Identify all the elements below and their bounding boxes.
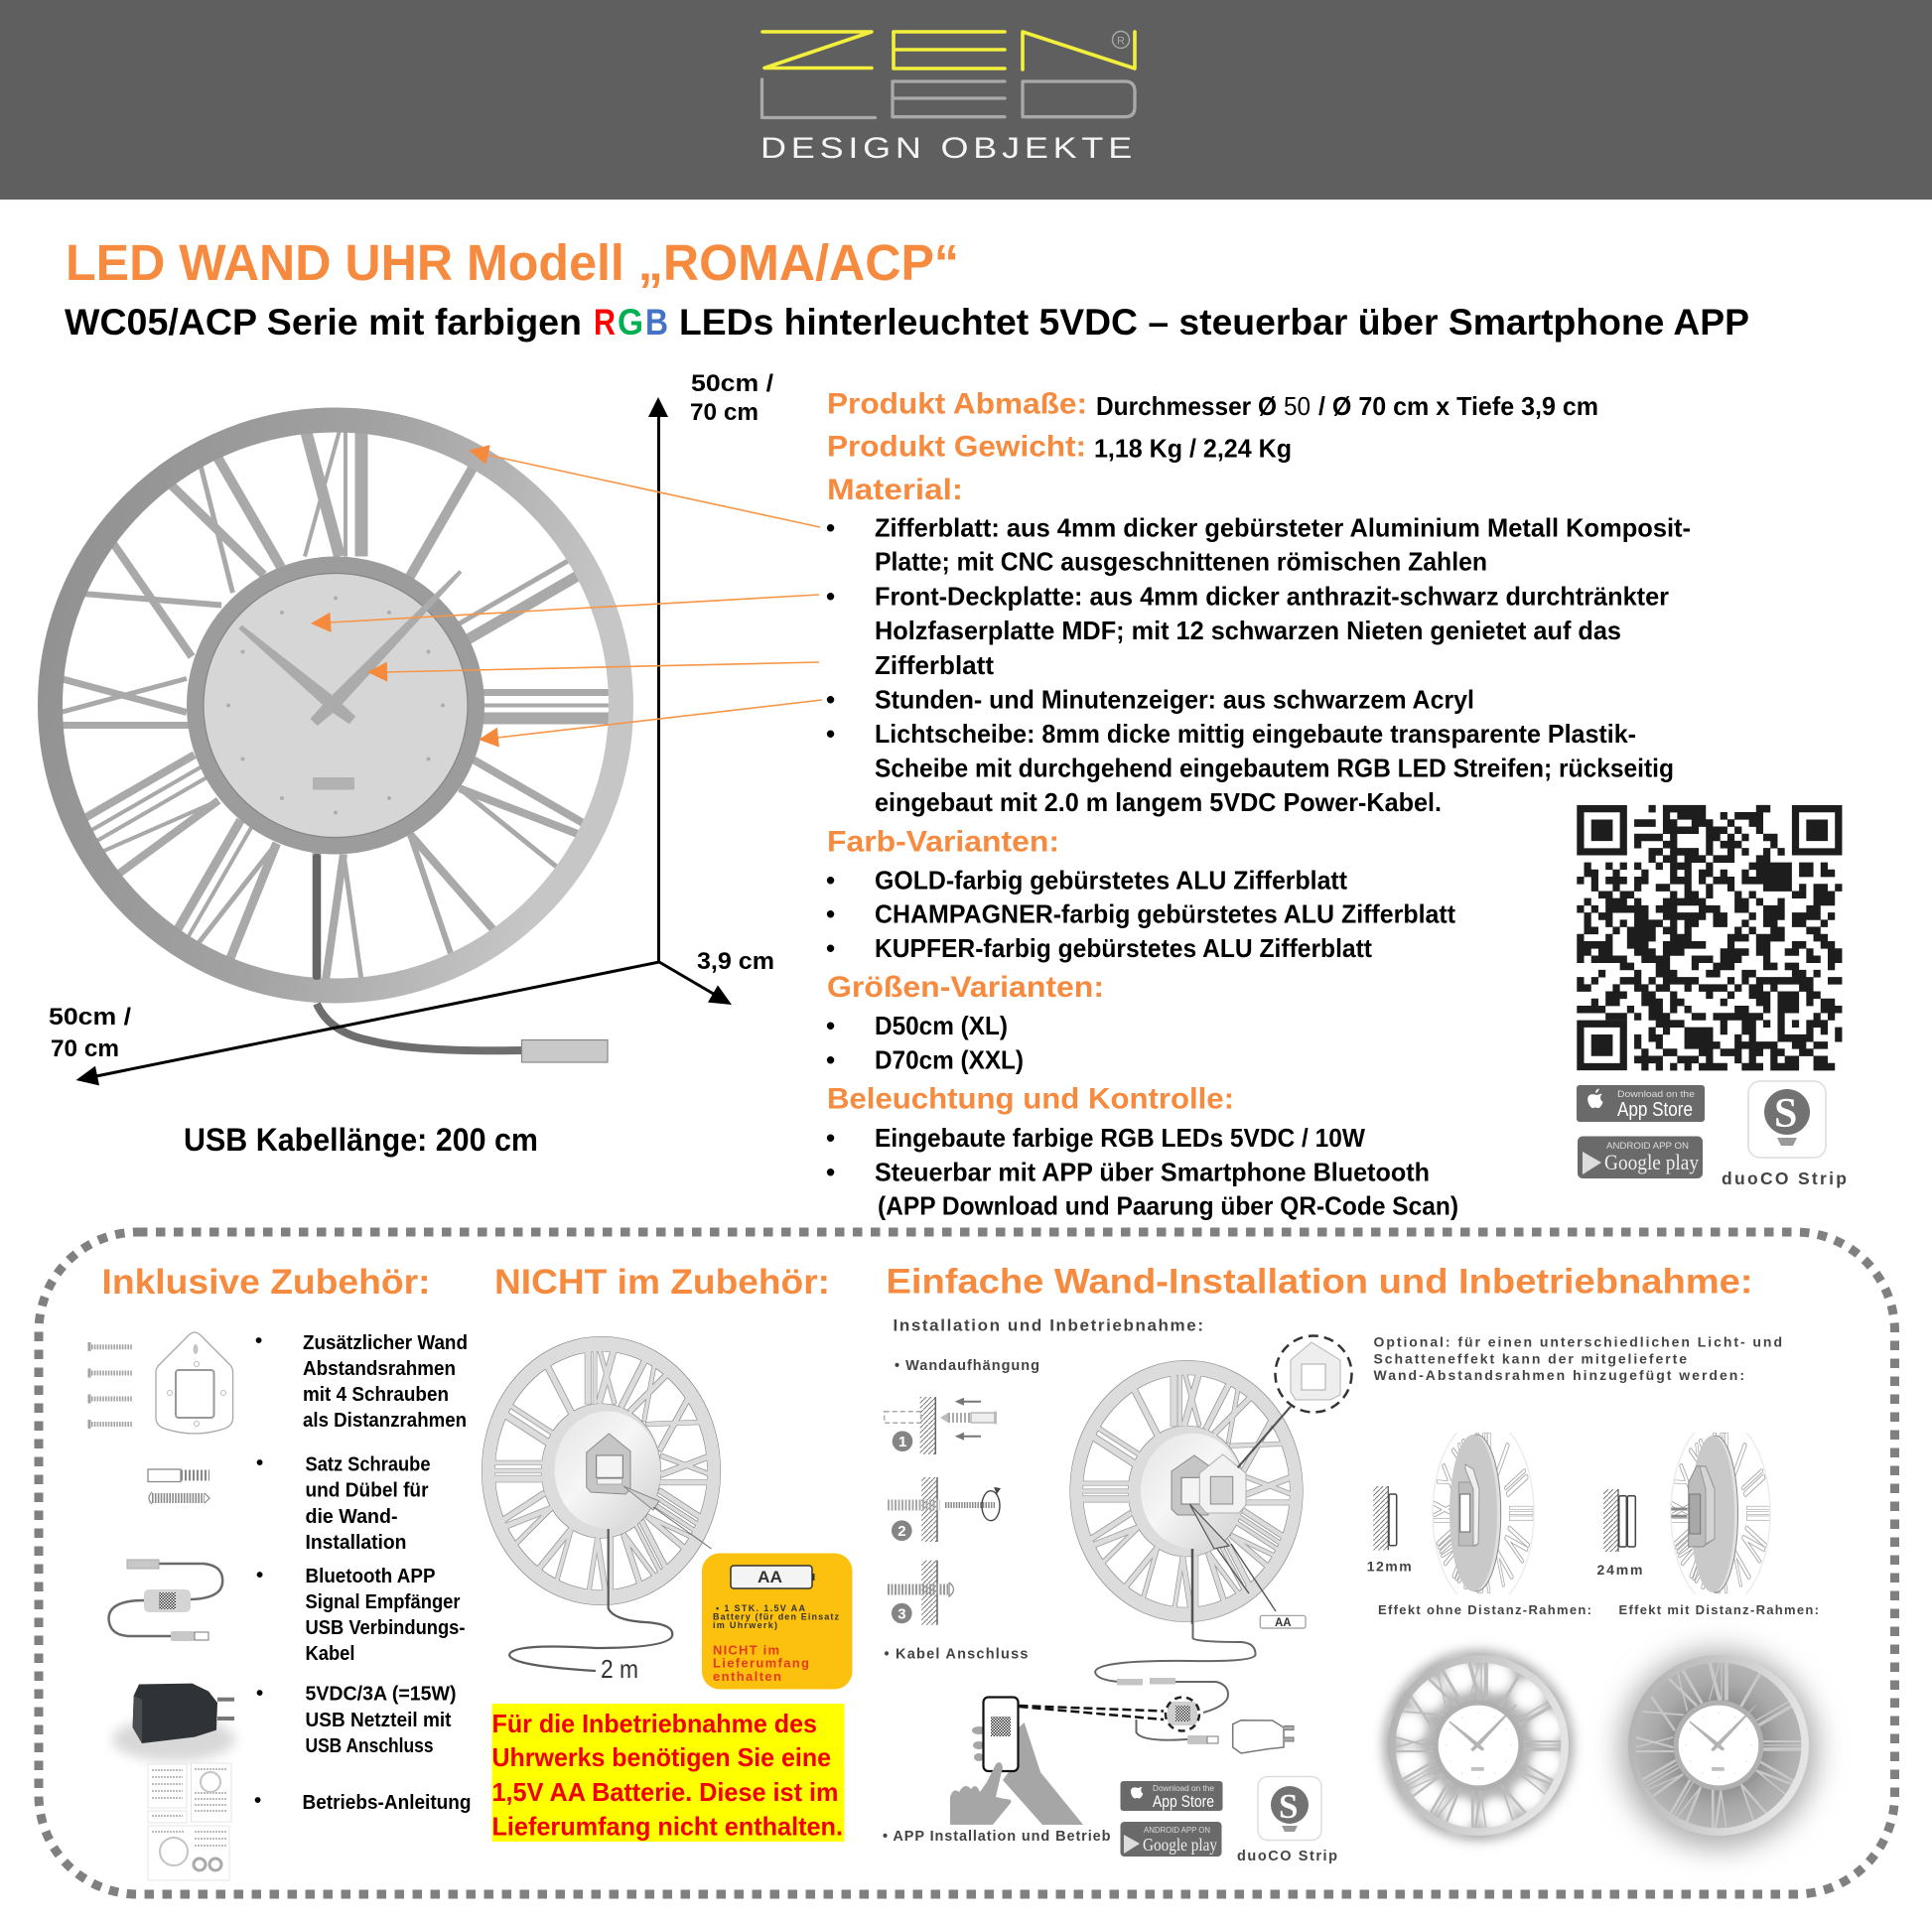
spec: weight <box>827 431 1292 463</box>
list: spacer frame: Zusätzlicher Wand <box>303 1331 468 1354</box>
list: Bluetooth receiver: Signal Empfänger <box>306 1590 461 1613</box>
badge: App Store small <box>1120 1781 1223 1811</box>
spec: material <box>826 474 1691 817</box>
subtitle: B <box>645 302 668 343</box>
heading: installation: Einfache Wand-Installation und Inbetriebnahme: <box>886 1263 1753 1301</box>
list: spacer frame: mit 4 Schrauben <box>303 1383 449 1406</box>
icon: Bluetooth receiver cable <box>109 1560 222 1641</box>
not included note: Lieferumfang <box>713 1656 809 1670</box>
header banner <box>0 0 1932 200</box>
receiver module <box>1168 1702 1197 1725</box>
title: LED WAND UHR Modell „ROMA/ACP“ <box>66 234 959 291</box>
spec: material: Lichtscheibe: 8mm dicke mittig eingebaute transparente Plastik- <box>875 719 1636 749</box>
spec: material: • <box>826 512 835 542</box>
step 3: screw fixed: 3 <box>897 1606 906 1622</box>
badge: App Store small: App Store <box>1153 1792 1214 1811</box>
power cable <box>317 1004 522 1050</box>
logo: ZEN LED <box>762 32 1135 117</box>
hub ring <box>196 566 476 846</box>
list: screws and dowels <box>256 1451 431 1554</box>
spec: lighting and control: Beleuchtung und Kontrolle: <box>827 1082 1234 1116</box>
spec: dimensions: Durchmesser Ø <box>1096 391 1277 421</box>
subtitle: G <box>618 302 643 343</box>
list: spacer frame <box>255 1329 468 1432</box>
main clock <box>50 420 621 1062</box>
spec: colour variants: • <box>826 899 835 929</box>
not included note <box>713 1642 809 1684</box>
battery description <box>713 1603 840 1630</box>
badge: App Store: Download on the <box>1617 1089 1695 1100</box>
badge: App Store: App Store <box>1617 1099 1693 1121</box>
callout: AA battery <box>702 1553 852 1690</box>
list: spacer frame: als Distanzrahmen <box>303 1409 467 1432</box>
warning box <box>492 1704 844 1842</box>
spec: weight: Produkt Gewicht: <box>827 431 1086 463</box>
dimension labels: 70 cm <box>690 399 759 426</box>
app name label small: duoCO Strip <box>1237 1849 1337 1864</box>
dial label plate <box>313 777 354 790</box>
hub disc <box>554 1412 659 1529</box>
registered mark: R <box>1117 36 1125 48</box>
list: screws and dowels: und Dübel für <box>306 1479 429 1501</box>
list: USB adapter: 5VDC/3A (=15W) <box>306 1682 457 1706</box>
step 1: drill and dowel: 1 <box>898 1434 906 1450</box>
diagram: clock side view without spacer <box>1432 1433 1535 1594</box>
step 2: insert screw: 2 <box>897 1523 906 1540</box>
spec: size variants: Größen-Varianten: <box>827 971 1104 1004</box>
badge: Google play <box>1578 1136 1703 1178</box>
spec: dimensions: 50 <box>1284 391 1311 421</box>
spec: material: Zifferblatt: aus 4mm dicker gebürsteter Aluminium Metall Komposit- <box>875 512 1691 542</box>
spec: material: Platte; mit CNC ausgeschnittenen römischen Zahlen <box>875 546 1487 576</box>
spec: lighting and control <box>826 1082 1458 1221</box>
list: USB adapter <box>256 1682 457 1757</box>
badge: Google play small <box>1120 1822 1221 1857</box>
cable over clock <box>1191 1549 1193 1624</box>
render: lit clock without spacer <box>1384 1651 1573 1840</box>
battery description: • 1 STK. 1.5V AA <box>716 1603 806 1613</box>
spec: weight: 1,18 Kg / 2,24 Kg <box>1094 433 1292 463</box>
spec: lighting and control: Eingebaute farbige RGB LEDs 5VDC / 10W <box>875 1123 1365 1153</box>
warning box: Lieferumfang nicht enthalten. <box>492 1811 843 1841</box>
spec: size variants: D50cm (XL) <box>875 1011 1008 1040</box>
diagram: 24mm spacer: 24mm <box>1596 1562 1642 1578</box>
spec: material: • <box>826 582 835 612</box>
spec: colour variants <box>826 826 1455 963</box>
outer ring <box>50 420 621 991</box>
list: spacer frame: • <box>255 1329 262 1352</box>
list: manual: Betriebs-Anleitung <box>302 1791 471 1814</box>
spec: colour variants: • <box>826 866 835 895</box>
rivets <box>226 596 445 814</box>
charger <box>1233 1721 1284 1753</box>
heading: not included: NICHT im Zubehör: <box>494 1263 830 1302</box>
spec: size variants <box>826 971 1104 1074</box>
spec: lighting and control: Steuerbar mit APP über Smartphone Bluetooth <box>875 1158 1430 1187</box>
spec: material: Stunden- und Minutenzeiger: aus schwarzem Acryl <box>875 685 1474 715</box>
QR code <box>1577 809 1842 1067</box>
spec: material: Scheibe mit durchgehend eingebautem RGB LED Streifen; rückseitig <box>875 753 1674 782</box>
panel: accessories and installation dashed frame <box>39 1232 1894 1894</box>
USB plug <box>1187 1735 1207 1744</box>
label: cable connection: • Kabel Anschluss <box>884 1646 1029 1662</box>
optional effect note <box>1374 1334 1782 1383</box>
pointer wedge <box>1189 1504 1229 1549</box>
caption: with spacer: Effekt mit Distanz-Rahmen: <box>1618 1602 1819 1617</box>
AA battery tag <box>1260 1615 1306 1628</box>
list: Bluetooth receiver <box>256 1564 465 1665</box>
clock back view with battery lead <box>488 1344 714 1684</box>
dimension labels: 50cm / <box>691 370 773 397</box>
step 3: screw fixed <box>888 1561 953 1625</box>
step 1: drill and dowel <box>885 1397 997 1454</box>
optional effect note: Wand-Abstandsrahmen hinzugefügt werden: <box>1374 1367 1744 1383</box>
dimension labels: 3,9 cm <box>697 948 774 975</box>
spec: colour variants: CHAMPAGNER-farbig gebürstetes ALU Zifferblatt <box>875 899 1455 929</box>
logo subtitle: DESIGN OBJEKTE <box>760 132 1137 165</box>
spec: material: eingebaut mit 2.0 m langem 5VDC Power-Kabel. <box>875 787 1442 817</box>
step 2: insert screw <box>888 1477 1001 1542</box>
wiring diagram <box>1019 1622 1294 1753</box>
icon: USB power adapter <box>112 1684 235 1761</box>
spec: dimensions: Produkt Abmaße: <box>827 387 1087 421</box>
list: Bluetooth receiver: Kabel <box>306 1642 355 1665</box>
list: manual <box>254 1789 471 1814</box>
battery description: Battery (für den Einsatz <box>713 1612 840 1622</box>
cable length label: 2 m <box>601 1654 638 1684</box>
spec: dimensions <box>827 387 1598 421</box>
spec: lighting and control: (APP Download und Paarung über QR-Code Scan) <box>878 1191 1458 1221</box>
dimension labels: 50cm / <box>49 1004 131 1031</box>
hand with smartphone <box>950 1698 1083 1825</box>
list: USB adapter: USB Netzteil mit <box>306 1709 452 1731</box>
not included note: enthalten <box>713 1669 781 1684</box>
spec: material: • <box>826 719 835 749</box>
spec: colour variants: • <box>826 933 835 963</box>
subtitle: LEDs hinterleuchtet 5VDC – steuerbar über Smartphone APP <box>679 302 1749 343</box>
spec: material: • <box>826 685 835 715</box>
dark cable bar <box>313 854 321 980</box>
spec: colour variants: KUPFER-farbig gebürstetes ALU Zifferblatt <box>875 933 1372 963</box>
icon: duoCO Strip <box>1748 1081 1826 1158</box>
list: USB adapter: • <box>256 1682 263 1705</box>
clock hands <box>238 570 462 726</box>
cable <box>509 1529 672 1671</box>
dimension labels: 70 cm <box>51 1035 119 1062</box>
icon: duoCO Strip: S <box>1774 1091 1797 1137</box>
spec: material: Front-Deckplatte: aus 4mm dicker anthrazit-schwarz durchtränkter <box>875 582 1669 612</box>
badge: Google play small: ANDROID APP ON <box>1144 1826 1210 1835</box>
USB plug <box>522 1040 608 1062</box>
diagram: 12mm spacer: 12mm <box>1367 1559 1412 1575</box>
list: screws and dowels: Satz Schraube <box>306 1453 431 1475</box>
diagram: clock side view with spacer <box>1671 1419 1770 1607</box>
list: Bluetooth receiver: • <box>256 1564 263 1586</box>
badge: Google play small: Google play <box>1143 1835 1217 1855</box>
icon: duoCO Strip small <box>1258 1777 1321 1841</box>
heading: included accessories: Inklusive Zubehör: <box>101 1263 431 1302</box>
spec: size variants: D70cm (XXL) <box>875 1044 1024 1074</box>
list: screws and dowels: Installation <box>306 1531 407 1554</box>
list: Bluetooth receiver: Bluetooth APP <box>306 1565 435 1587</box>
orange pointer arrows <box>311 445 822 748</box>
subtitle <box>65 302 1749 343</box>
battery lead lines <box>1217 1544 1276 1611</box>
label: app installation: • APP Installation und Betrieb <box>883 1829 1111 1845</box>
spec: lighting and control: • <box>826 1158 835 1187</box>
badge: Google play: Google play <box>1604 1150 1699 1174</box>
caption: without spacer: Effekt ohne Distanz-Rahmen: <box>1378 1602 1591 1617</box>
hub disc <box>1141 1434 1244 1549</box>
list: spacer frame: Abstandsrahmen <box>303 1357 456 1380</box>
spec: dimensions: / Ø 70 cm x Tiefe 3,9 cm <box>1318 391 1598 421</box>
diagram: 24mm spacer <box>1596 1489 1642 1578</box>
spec: size variants: • <box>826 1011 835 1040</box>
dashed link from phone <box>1019 1706 1164 1720</box>
list: manual: • <box>254 1789 261 1812</box>
warning box: Für die Inbetriebnahme des <box>492 1709 817 1738</box>
battery label: AA <box>758 1568 782 1586</box>
subtitle: R <box>594 302 616 343</box>
spec: size variants: • <box>826 1044 835 1074</box>
installation subheading: Installation und Inbetriebnahme: <box>894 1316 1203 1334</box>
battery description: im Uhrwerk) <box>713 1620 777 1630</box>
battery pointer <box>623 1486 659 1510</box>
subtitle: WC05/ACP Serie mit farbigen <box>65 302 582 343</box>
diagram: 12mm spacer <box>1367 1486 1412 1575</box>
mounting plate white <box>1199 1454 1246 1513</box>
badge: Google play: ANDROID APP ON <box>1606 1141 1689 1152</box>
icon: dowel and screw <box>148 1469 209 1504</box>
optional effect note: Optional: für einen unterschiedlichen Licht- und <box>1374 1334 1782 1350</box>
icon: spacer frame and screws <box>89 1332 233 1434</box>
icon: operating manual <box>148 1763 231 1880</box>
label: wall mounting: • Wandaufhängung <box>895 1358 1039 1374</box>
installation clock back view <box>1076 1368 1306 1629</box>
list: Bluetooth receiver: USB Verbindungs- <box>306 1616 465 1639</box>
callout line <box>1238 1407 1291 1467</box>
dimension labels <box>49 370 774 1062</box>
installation clock back view: AA <box>1275 1617 1292 1629</box>
mounting plate <box>587 1434 630 1494</box>
icon: duoCO Strip small: S <box>1279 1787 1298 1826</box>
spec: colour variants: Farb-Varianten: <box>827 826 1059 858</box>
list: screws and dowels: die Wand- <box>306 1505 397 1528</box>
spec: material: Material: <box>827 474 963 506</box>
roman numerals <box>61 431 611 981</box>
dial face <box>204 574 468 838</box>
render: lit clock with spacer <box>1619 1650 1818 1849</box>
spec: material: Holzfaserplatte MDF; mit 12 schwarzen Nieten genietet auf das <box>875 616 1621 645</box>
battery icon <box>731 1566 812 1588</box>
warning box: 1,5V AA Batterie. Diese ist im <box>492 1777 838 1807</box>
spec: material: Zifferblatt <box>875 650 994 680</box>
not included note: NICHT im <box>713 1642 779 1658</box>
optional effect note: Schatteneffekt kann der mitgelieferte <box>1374 1350 1687 1366</box>
app name label: duoCO Strip <box>1722 1169 1847 1188</box>
badge: App Store small: Download on the <box>1153 1784 1215 1793</box>
callout: spacer frame detail <box>1275 1336 1352 1412</box>
badge: App Store <box>1577 1085 1705 1122</box>
cable length label: USB Kabellänge: 200 cm <box>184 1122 538 1158</box>
mounting plate dark <box>1172 1455 1208 1515</box>
list: USB adapter: USB Anschluss <box>306 1734 433 1757</box>
spec: lighting and control: • <box>826 1123 835 1153</box>
warning box: Uhrwerks benötigen Sie eine <box>492 1742 831 1772</box>
spec: colour variants: GOLD-farbig gebürstetes ALU Zifferblatt <box>875 866 1347 895</box>
list: screws and dowels: • <box>256 1451 263 1474</box>
dimension axes <box>75 397 732 1085</box>
